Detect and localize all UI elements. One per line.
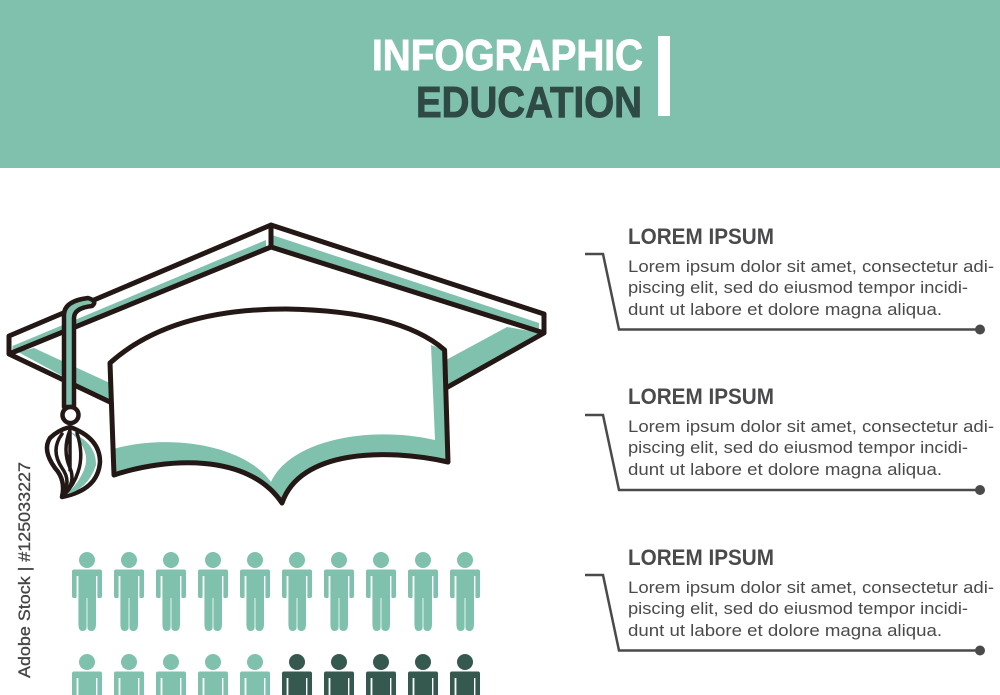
tassel [47,427,100,497]
text block 1 [585,224,994,334]
text block 2 [585,384,994,495]
body 2: dunt ut labore et dolore magna aliqua. [628,460,942,479]
connector 1 [585,254,985,334]
body 1 [628,257,994,319]
title [372,31,643,127]
text block 3 [585,545,994,656]
title: EDUCATION [416,78,642,127]
body 3: Lorem ipsum dolor sit amet, consectetur adi- [628,578,994,597]
icon: graduation cap [9,225,544,503]
body 3 [628,578,994,640]
body 1: Lorem ipsum dolor sit amet, consectetur adi- [628,257,994,276]
tassel cord [64,298,94,407]
cap body outline [110,309,448,503]
cap body [110,309,448,503]
board teal edges and underside [12,235,541,403]
heading 2: LOREM IPSUM [628,384,774,409]
body 1: dunt ut labore et dolore magna aliqua. [628,300,942,319]
people row 1 [72,552,480,631]
tassel ring [62,407,78,423]
people row 2 light [72,654,270,695]
heading 3: LOREM IPSUM [628,545,774,570]
cap board [9,225,544,354]
body 2: piscing elit, sed do eiusmod tempor incidi- [628,438,968,457]
cap body teal shading [113,345,448,503]
body 1: piscing elit, sed do eiusmod tempor incidi- [628,278,968,297]
title accent bar [658,36,670,116]
body 2: Lorem ipsum dolor sit amet, consectetur adi- [628,417,994,436]
body 2 [628,417,994,479]
stock credit: Adobe Stock | #125033227 [15,462,34,678]
connector 2 [585,415,985,495]
title: INFOGRAPHIC [372,31,643,80]
people row 2 dark [282,654,480,695]
board outline [9,225,544,402]
heading 1: LOREM IPSUM [628,224,774,249]
body 3: piscing elit, sed do eiusmod tempor incidi- [628,599,968,618]
header banner [0,0,1000,168]
body 3: dunt ut labore et dolore magna aliqua. [628,621,942,640]
connector 3 [585,575,985,656]
